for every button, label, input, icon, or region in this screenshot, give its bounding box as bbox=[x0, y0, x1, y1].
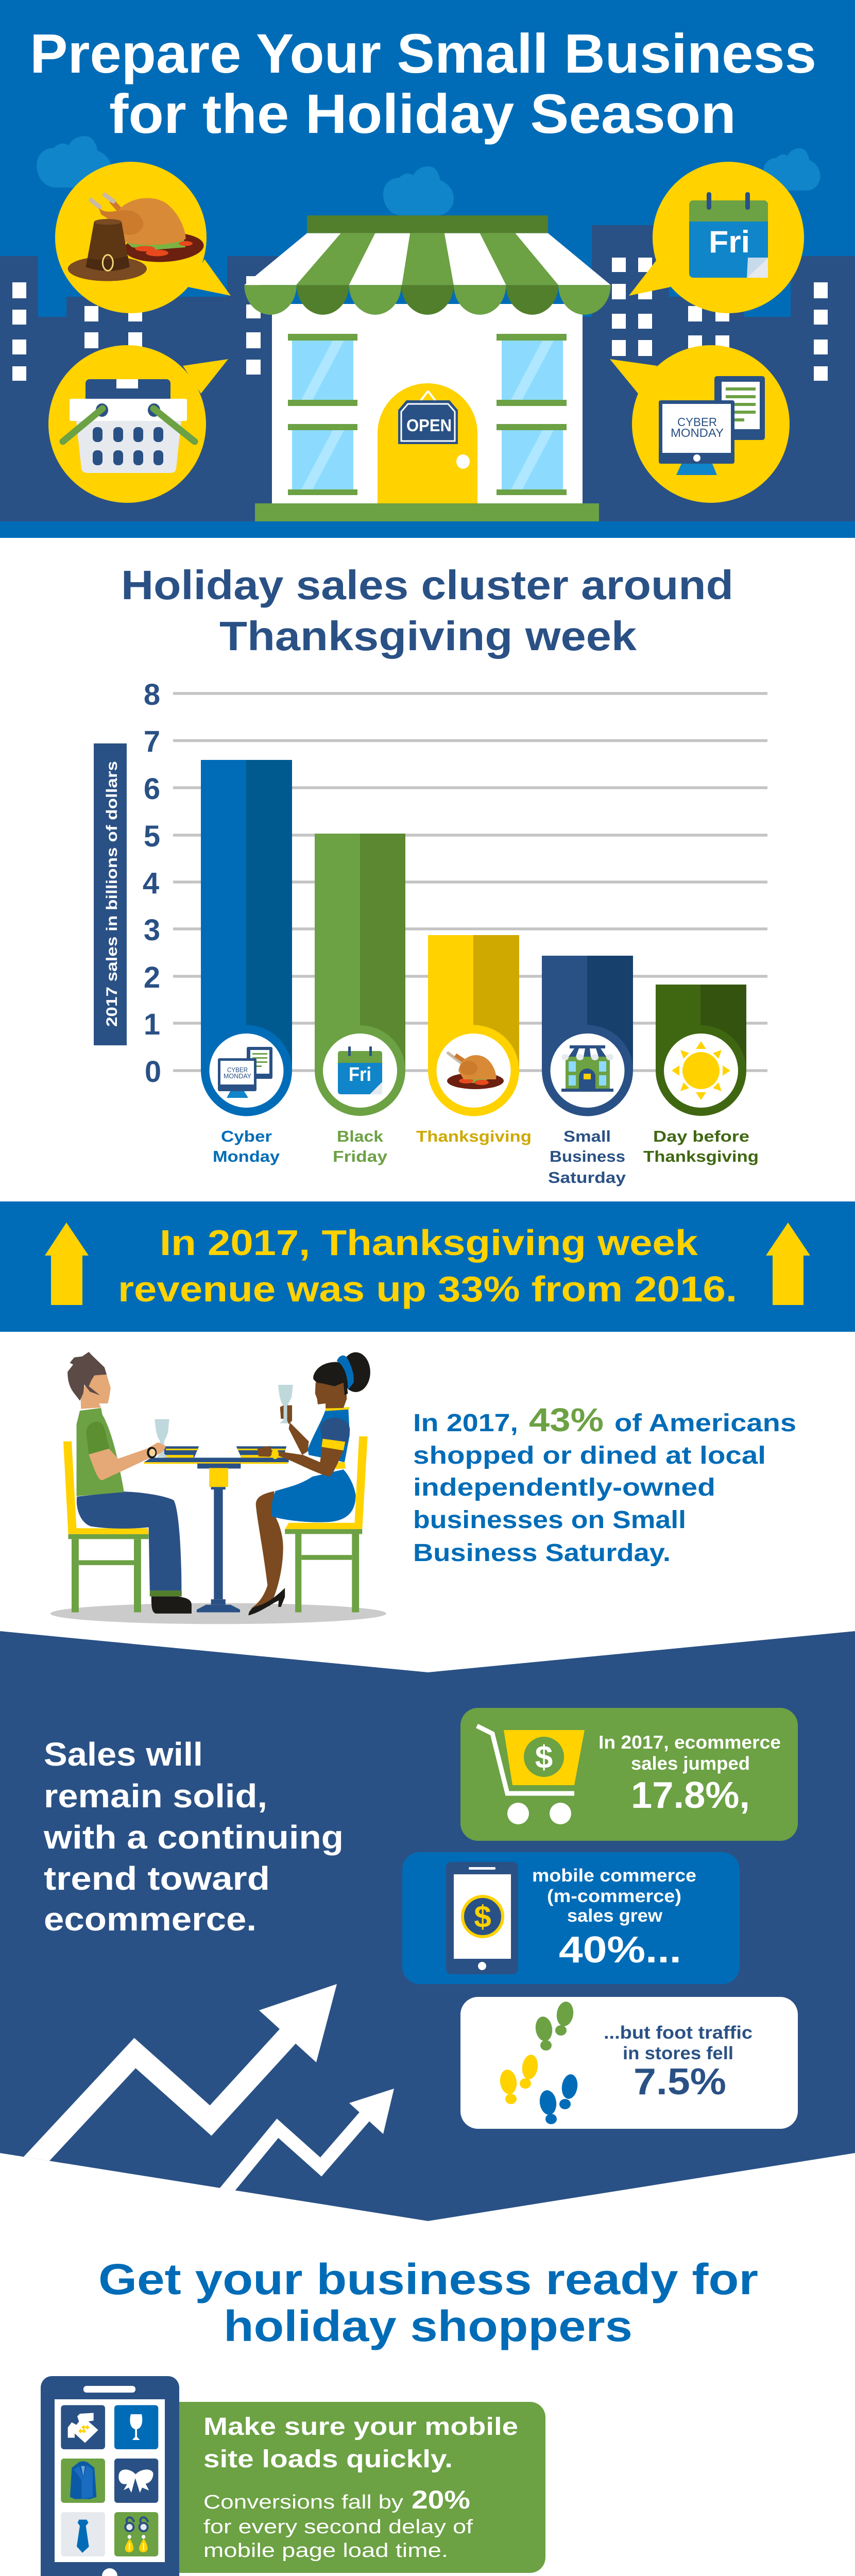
icon: bow bbox=[118, 2469, 153, 2493]
card: mobile commerce: 40%... bbox=[559, 1929, 681, 1971]
y axis numbers: 0 bbox=[145, 1055, 161, 1089]
text: small business saturday stat: businesses on Small bbox=[413, 1506, 686, 1534]
heading: sales will remain solid: with a continuing bbox=[43, 1819, 344, 1856]
bar labels: Saturday bbox=[548, 1168, 626, 1187]
man bbox=[67, 1352, 192, 1614]
bar chart: 2017 holiday sales bbox=[94, 678, 767, 1187]
heading: holiday sales: Holiday sales cluster around bbox=[121, 562, 733, 608]
clouds bbox=[37, 136, 820, 215]
bubble: thanksgiving turkey and pilgrim hat bbox=[55, 162, 231, 313]
card: mobile site speed: Make sure your mobile bbox=[203, 2413, 518, 2441]
y axis numbers: 1 bbox=[144, 1008, 160, 1041]
heading: sales will remain solid: ecommerce. bbox=[44, 1901, 256, 1938]
banner text: In 2017, Thanksgiving week bbox=[160, 1223, 698, 1263]
heading: get your business ready: holiday shoppers bbox=[224, 2302, 632, 2350]
card: mobile commerce: mobile commerce bbox=[532, 1866, 696, 1886]
y axis numbers: 6 bbox=[144, 772, 160, 806]
heading: sales will remain solid bbox=[43, 1736, 344, 1938]
bar: thanksgiving bbox=[428, 935, 519, 1116]
y axis numbers: 8 bbox=[144, 678, 160, 711]
icon: shirt bbox=[68, 2413, 98, 2443]
bar: black friday: Fri bbox=[349, 1064, 371, 1086]
door bbox=[378, 383, 477, 503]
bar labels bbox=[213, 1127, 759, 1187]
bubble: small business saturday basket bbox=[48, 345, 228, 503]
banner text bbox=[118, 1223, 737, 1309]
bar labels: Monday bbox=[213, 1147, 280, 1165]
bar: cyber monday bbox=[201, 760, 292, 1116]
text: small business saturday stat: In 2017, bbox=[413, 1410, 518, 1437]
title: Prepare Your Small Business bbox=[30, 22, 816, 84]
card: mobile site speed bbox=[175, 2402, 545, 2573]
arrow: small upward trend bbox=[219, 2089, 394, 2191]
heading: sales will remain solid: remain solid, bbox=[44, 1777, 267, 1815]
card: foot traffic: ...but foot traffic bbox=[604, 2023, 753, 2043]
card: mobile site speed: mobile page load time. bbox=[203, 2540, 448, 2562]
heading: get your business ready: Get your business ready for bbox=[98, 2255, 758, 2303]
icon: footprints bbox=[499, 2001, 579, 2124]
card: foot traffic: in stores fell bbox=[623, 2043, 733, 2063]
card: ecommerce sales bbox=[460, 1708, 798, 1841]
arrow: right up bbox=[766, 1223, 810, 1305]
bar: cyber monday: CYBER bbox=[227, 1066, 248, 1074]
storefront bbox=[244, 215, 611, 521]
woman bbox=[248, 1352, 370, 1615]
bubble: black friday calendar bbox=[629, 162, 804, 313]
bar labels: Small bbox=[563, 1127, 611, 1145]
title: for the Holiday Season bbox=[109, 82, 736, 145]
bar labels: Thanksgiving bbox=[643, 1147, 759, 1165]
panel: header hero bbox=[0, 0, 855, 538]
panel: ecommerce trend bbox=[0, 1631, 855, 2221]
text: small business saturday stat: 43% bbox=[529, 1401, 604, 1438]
store windows bbox=[288, 334, 567, 495]
icon: necktie bbox=[77, 2520, 89, 2553]
text: small business saturday stat: shopped or dined at local bbox=[413, 1442, 766, 1469]
bar: day before thanksgiving bbox=[656, 985, 746, 1116]
bar: cyber monday: MONDAY bbox=[224, 1072, 251, 1080]
bar labels: Business bbox=[550, 1147, 625, 1165]
woman's chair bbox=[285, 1436, 368, 1612]
text: small business saturday stat bbox=[413, 1401, 796, 1567]
title bbox=[30, 22, 816, 145]
card: mobile commerce: $ bbox=[474, 1900, 491, 1934]
banner text: revenue was up 33% from 2016. bbox=[118, 1269, 737, 1309]
heading: holiday sales bbox=[121, 562, 733, 659]
card: ecommerce sales: 17.8%, bbox=[631, 1775, 750, 1816]
y axis numbers: 4 bbox=[143, 867, 159, 900]
table bbox=[144, 1446, 289, 1612]
card: mobile site speed: site loads quickly. bbox=[203, 2446, 453, 2473]
bar labels: Friday bbox=[333, 1147, 388, 1165]
bubble: cyber monday devices: MONDAY bbox=[671, 426, 724, 439]
city buildings bbox=[0, 225, 855, 521]
card: ecommerce sales: sales jumped bbox=[631, 1753, 750, 1774]
illustration: couple dining at table bbox=[50, 1352, 386, 1624]
y axis numbers: 2 bbox=[144, 961, 160, 994]
text: small business saturday stat: independently-owned bbox=[413, 1474, 715, 1501]
y axis numbers bbox=[143, 678, 161, 1089]
bar: small business saturday bbox=[542, 956, 633, 1116]
card: mobile commerce: (m-commerce) bbox=[547, 1886, 681, 1906]
icon: earrings bbox=[125, 2517, 148, 2552]
text: small business saturday stat: Business Saturday. bbox=[413, 1539, 671, 1567]
bubble: cyber monday devices bbox=[610, 345, 790, 503]
bar labels: Thanksgiving bbox=[416, 1127, 532, 1145]
bar: black friday bbox=[315, 834, 405, 1116]
open sign bbox=[398, 391, 458, 444]
card: mobile commerce: sales grew bbox=[567, 1906, 663, 1926]
bubble: black friday calendar: Fri bbox=[709, 225, 750, 259]
card: foot traffic: 7.5% bbox=[634, 2061, 726, 2103]
card: mobile site speed: 20% bbox=[412, 2485, 470, 2514]
heading: get your business ready bbox=[98, 2255, 758, 2350]
y axis numbers: 5 bbox=[144, 820, 160, 853]
man's chair bbox=[63, 1442, 149, 1612]
icon: wine glass bbox=[130, 2414, 142, 2440]
arrow: left up bbox=[45, 1223, 89, 1305]
bar labels: Black bbox=[337, 1127, 384, 1145]
icon: jacket bbox=[70, 2461, 96, 2499]
card: mobile site speed: Conversions fall by bbox=[203, 2492, 403, 2513]
bubble: cyber monday devices: CYBER bbox=[677, 415, 717, 429]
panel: mobile site tip bbox=[41, 2376, 545, 2576]
heading: sales will remain solid: Sales will bbox=[44, 1736, 203, 1773]
card: foot traffic bbox=[460, 1997, 798, 2129]
y axis numbers: 7 bbox=[144, 725, 160, 758]
y axis numbers: 3 bbox=[144, 913, 160, 947]
card: ecommerce sales: $ bbox=[535, 1740, 553, 1775]
icon: smartphone with shopping tiles bbox=[41, 2376, 179, 2576]
card: mobile commerce bbox=[402, 1852, 740, 1984]
card: mobile site speed: for every second delay of bbox=[203, 2516, 473, 2538]
heading: holiday sales: Thanksgiving week bbox=[219, 613, 637, 659]
text: small business saturday stat: of Americans bbox=[614, 1410, 796, 1437]
panel: revenue banner bbox=[0, 1201, 855, 1332]
awning bbox=[244, 215, 611, 315]
bar labels: Day before bbox=[653, 1127, 749, 1145]
open sign: OPEN bbox=[406, 416, 452, 435]
building windows bbox=[12, 258, 828, 381]
heading: sales will remain solid: trend toward bbox=[44, 1860, 270, 1897]
arrow: large upward trend bbox=[24, 1984, 337, 2161]
y axis title: 2017 sales in billions of dollars bbox=[104, 761, 121, 1027]
card: ecommerce sales: In 2017, ecommerce bbox=[598, 1732, 781, 1753]
y axis title bbox=[94, 743, 127, 1045]
bar labels: Cyber bbox=[221, 1127, 272, 1145]
